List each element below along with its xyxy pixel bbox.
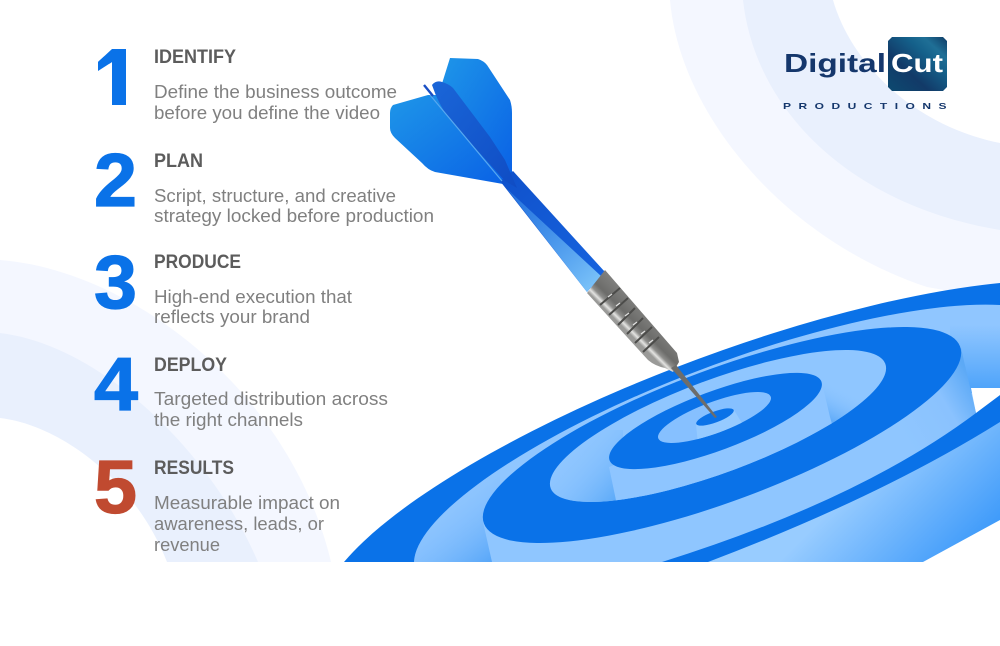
light floor 2 (550, 350, 886, 502)
steps list (92, 37, 434, 555)
logo (783, 37, 947, 111)
centre flight (432, 81, 517, 188)
rear flight (440, 58, 512, 176)
step 2: strategy locked before production (154, 206, 434, 226)
logo wordmark: Digital (784, 48, 886, 78)
step 5: Measurable impact on (154, 493, 340, 513)
logo box (888, 37, 947, 91)
shaft highlight (507, 189, 601, 292)
target board (344, 283, 1000, 585)
barrel (587, 270, 679, 372)
step 3: 3 (94, 240, 137, 324)
step 3 (94, 240, 352, 327)
step 3: PRODUCE (154, 252, 241, 273)
light floor 3 (658, 392, 771, 443)
step 1: 1 (92, 37, 134, 121)
step 1 (98, 49, 396, 123)
step 2: Script, structure, and creative (154, 186, 396, 206)
step 4 (94, 342, 388, 430)
floor 2 shading (559, 396, 853, 502)
dart (390, 58, 717, 418)
step 1: before you define the video (154, 103, 380, 123)
logo wordmark in box: Cut (891, 48, 943, 78)
lower outer wall (700, 415, 1000, 562)
barrel grooves (600, 288, 659, 352)
light floor ring (414, 305, 1000, 562)
outer dark ring (344, 283, 1000, 562)
step 2: 2 (94, 138, 137, 222)
step 4: the right channels (154, 410, 303, 430)
step 1: IDENTIFY (154, 47, 236, 68)
step 2: PLAN (154, 151, 203, 172)
wall of second step (483, 348, 976, 562)
bullseye (696, 408, 734, 426)
step 4: DEPLOY (154, 355, 227, 376)
barrel groove highlights (608, 294, 653, 343)
step 4: Targeted distribution across (154, 389, 388, 409)
needle (671, 365, 717, 418)
logo tagline: PRODUCTIONS (783, 103, 947, 111)
background shapes: top right (670, 0, 1000, 300)
step 5: RESULTS (154, 458, 234, 479)
step 2 (94, 138, 434, 226)
wall of third step (609, 394, 832, 500)
shaft (500, 171, 605, 292)
step 3: High-end execution that (154, 287, 352, 307)
floor shading (400, 325, 1000, 562)
step 5: revenue (154, 535, 220, 555)
background shapes: bottom left (0, 260, 331, 562)
flight highlight line (430, 95, 502, 181)
white gap (971, 388, 1000, 413)
left flight (390, 95, 505, 184)
dark ring 2 (482, 327, 962, 543)
step 4: 4 (94, 342, 138, 426)
dark ring 3 (609, 372, 822, 470)
flight edge (424, 85, 433, 96)
bullseye wall shade (696, 410, 742, 440)
step 5: awareness, leads, or (154, 514, 324, 534)
step 5 (94, 445, 340, 555)
step 5: 5 (94, 445, 137, 529)
step 3: reflects your brand (154, 307, 310, 327)
step 1: Define the business outcome (154, 82, 397, 102)
